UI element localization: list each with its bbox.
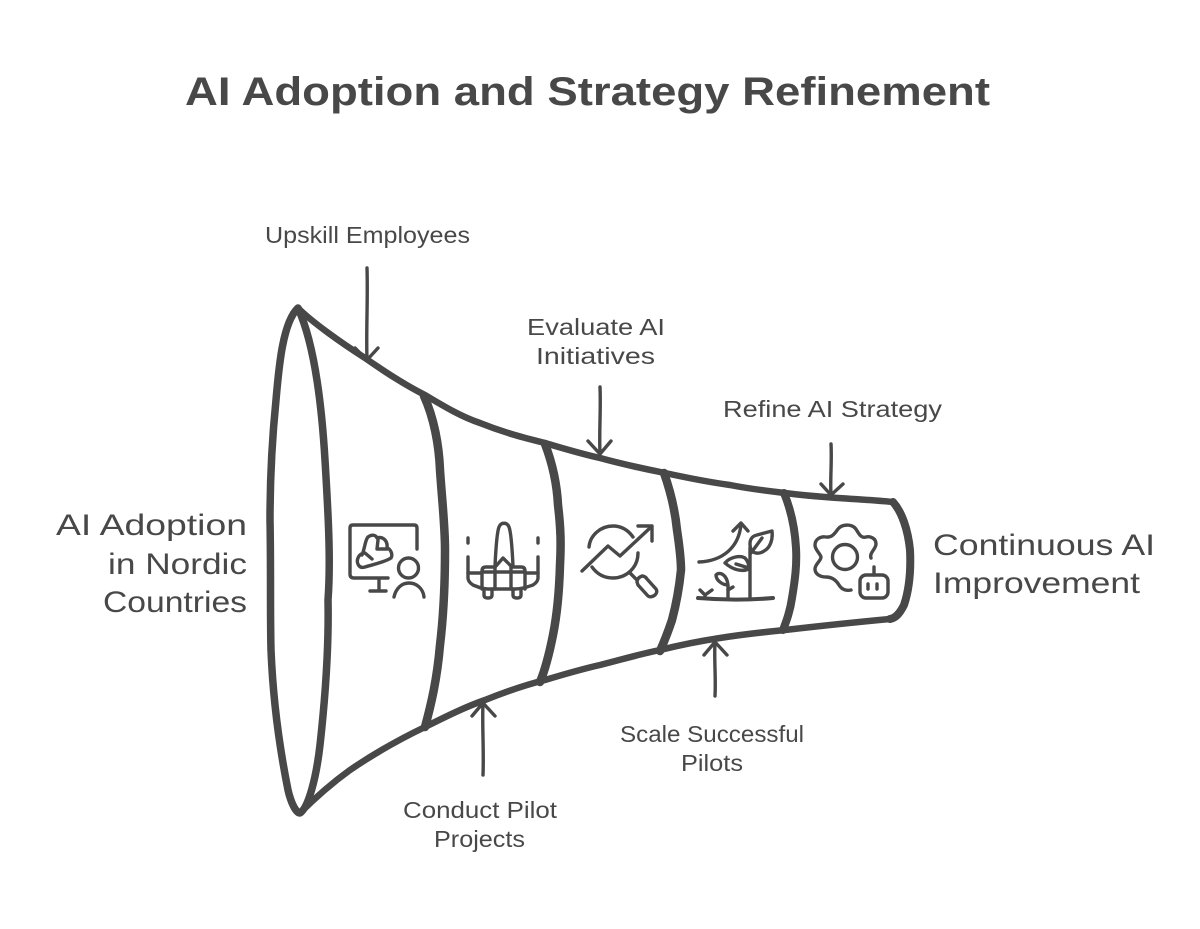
label: AI adoption in Nordic countries [56, 509, 247, 619]
funnel mouth ellipse [270, 308, 329, 813]
label: conduct pilot projects: Conduct Pilot [403, 797, 558, 823]
label: upskill employees: Upskill Employees [265, 222, 470, 248]
funnel seam 3 [660, 473, 681, 651]
icon: chart with magnifier [582, 526, 657, 597]
label: scale successful pilots: Scale Successful [620, 721, 804, 747]
arrow: scale successful pilots [704, 642, 727, 696]
label: scale successful pilots [620, 721, 804, 776]
icon: spacecraft [468, 523, 538, 598]
label: AI adoption in Nordic countries: AI Adoption [56, 509, 247, 542]
label: conduct pilot projects [403, 797, 558, 852]
label: evaluate AI initiatives [527, 314, 665, 369]
label: conduct pilot projects: Projects [434, 826, 525, 852]
funnel seam 1 [424, 396, 445, 727]
funnel seam 4 [783, 493, 796, 630]
arrow: conduct pilot projects [472, 703, 495, 775]
label: continuous AI improvement: Improvement [933, 567, 1141, 600]
label: AI adoption in Nordic countries: Countries [103, 586, 247, 619]
arrow: upskill employees [355, 268, 378, 360]
label: AI adoption in Nordic countries: in Nordic [108, 548, 247, 581]
label: evaluate AI initiatives: Initiatives [536, 343, 655, 369]
funnel end cap [890, 502, 910, 619]
arrow: refine AI strategy [821, 444, 843, 495]
label: evaluate AI initiatives: Evaluate AI [527, 314, 665, 340]
icon: growing plants [698, 523, 773, 600]
label: continuous AI improvement: Continuous AI [933, 529, 1155, 562]
title: AI Adoption and Strategy Refinement [185, 70, 990, 114]
icon: gear with robot [815, 525, 888, 598]
funnel seam 2 [540, 444, 561, 682]
label: continuous AI improvement [933, 529, 1155, 600]
arrow: evaluate AI initiatives [588, 387, 611, 454]
icon: monitor with person [350, 525, 424, 597]
label: refine AI strategy: Refine AI Strategy [723, 396, 943, 422]
label: scale successful pilots: Pilots [681, 750, 743, 776]
funnel [270, 308, 910, 813]
funnel outline [298, 308, 893, 502]
